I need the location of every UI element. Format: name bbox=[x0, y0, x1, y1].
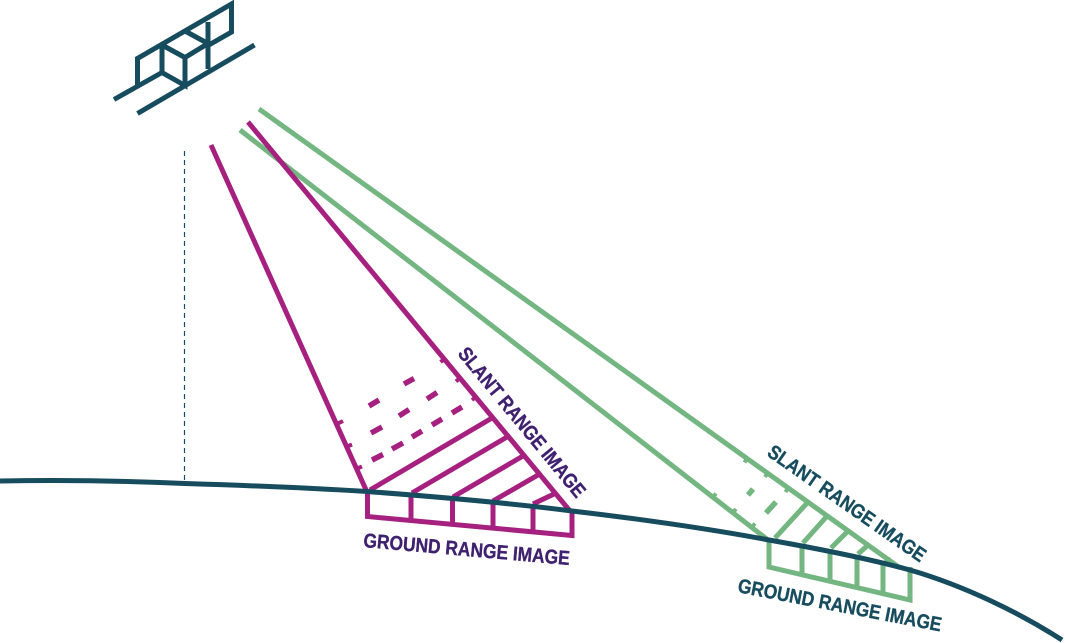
label: green slant range image: SLANT RANGE IMAGE bbox=[763, 441, 930, 567]
purple beam: near swath bbox=[211, 122, 572, 536]
nadir dashed line bbox=[184, 151, 186, 484]
icon: satellite bbox=[114, 4, 254, 114]
label: green ground range image: GROUND RANGE IMAGE bbox=[736, 575, 943, 636]
label: purple slant range image: SLANT RANGE IMAGE bbox=[453, 343, 590, 502]
green beam: far swath bbox=[240, 109, 910, 600]
label: purple ground range image: GROUND RANGE IMAGE bbox=[363, 530, 571, 570]
earth curve bbox=[0, 481, 1062, 640]
